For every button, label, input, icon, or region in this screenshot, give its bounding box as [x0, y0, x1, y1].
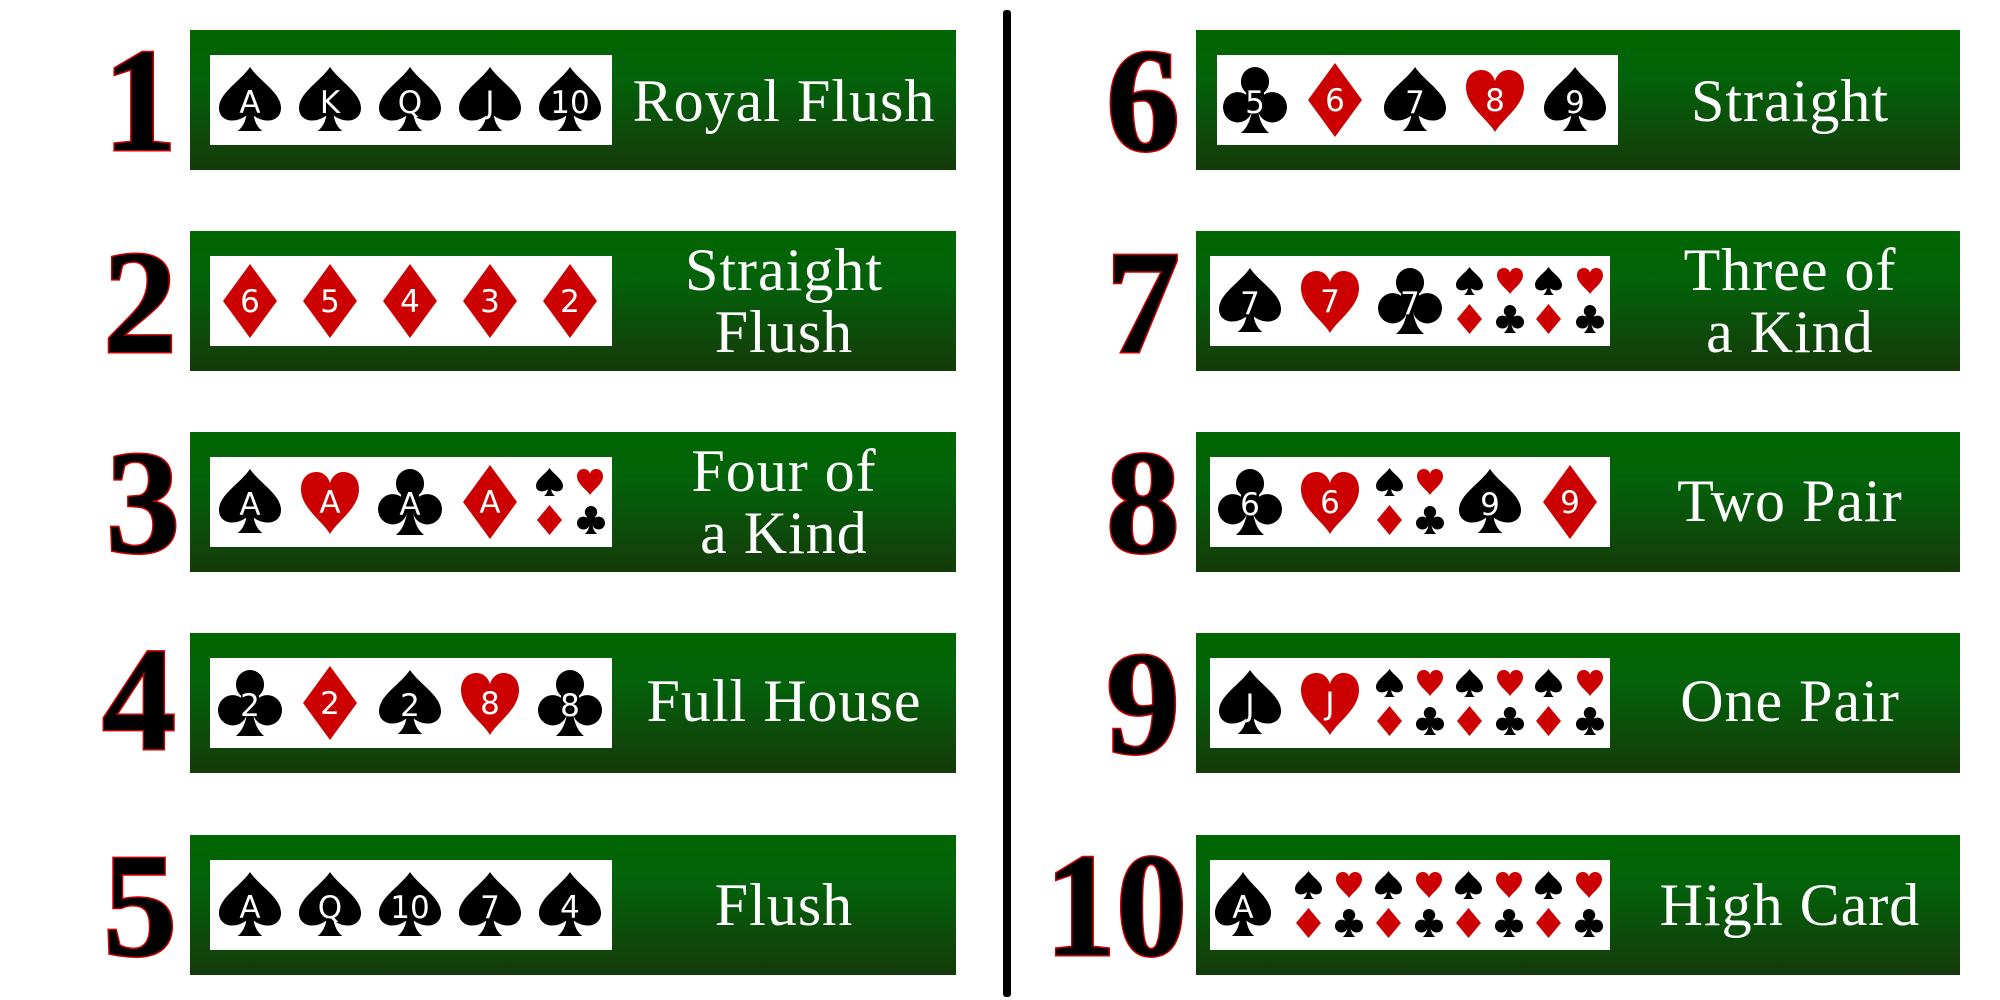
label 8: Two Pair — [1677, 468, 1903, 534]
number 1: 1 — [103, 19, 177, 183]
number 5: 5 — [103, 824, 177, 988]
cards 1: K — [320, 85, 341, 121]
cards 2: 5 — [320, 284, 340, 320]
label 1: Royal Flush — [633, 68, 935, 134]
cards 3: A — [319, 485, 341, 521]
cards 2: 2 — [560, 284, 580, 320]
cards 9 — [1210, 658, 1610, 748]
number 10: 10 — [1045, 824, 1187, 988]
number 7: 7 — [1106, 221, 1180, 385]
cards 8: 9 — [1560, 485, 1580, 521]
cards 10 — [1210, 860, 1610, 950]
cards 6 — [1217, 55, 1618, 145]
cards 3 — [210, 457, 612, 547]
hand 4: Full House — [102, 618, 956, 782]
label 7: Three of — [1684, 237, 1896, 303]
panel 7 — [1196, 231, 1960, 371]
panel 1 — [190, 30, 956, 170]
cards 4: 8 — [560, 688, 580, 724]
cards 6: 5 — [1245, 85, 1265, 121]
cards 1: Q — [398, 85, 422, 121]
number 6: 6 — [1106, 19, 1180, 183]
panel 10 — [1196, 835, 1960, 975]
cards 1: J — [483, 85, 495, 121]
label 3: a Kind — [700, 500, 868, 566]
panel 3 — [190, 432, 956, 572]
hand 2: Straight Flush — [103, 221, 956, 385]
cards 3: A — [239, 487, 261, 523]
panel 9 — [1196, 633, 1960, 773]
hand 9: One Pair — [1106, 622, 1960, 786]
label 9: One Pair — [1680, 668, 1900, 734]
panel 8 — [1196, 432, 1960, 572]
hand 8: Two Pair — [1106, 421, 1960, 585]
cards 7 — [1210, 256, 1610, 346]
label 2: Flush — [715, 299, 853, 365]
label 10: High Card — [1660, 872, 1920, 938]
cards 5 — [210, 860, 612, 950]
cards 6: 8 — [1485, 83, 1505, 119]
cards 7: 7 — [1240, 286, 1260, 322]
cards 6: 9 — [1565, 85, 1585, 121]
cards 4: 8 — [480, 686, 500, 722]
cards 7: 7 — [1400, 286, 1420, 322]
cards 5: 4 — [560, 890, 580, 926]
cards 2 — [210, 256, 612, 346]
label 2: Straight — [685, 237, 883, 303]
label 3: Four of — [691, 438, 877, 504]
cards 5: 10 — [390, 890, 430, 926]
label 5: Flush — [715, 872, 853, 938]
hand 10: High Card — [1045, 824, 1960, 988]
cards 9: J — [1243, 688, 1255, 724]
cards 8: 6 — [1320, 485, 1340, 521]
number 8: 8 — [1106, 421, 1180, 585]
number 2: 2 — [103, 221, 177, 385]
cards 4 — [210, 658, 612, 748]
cards 1 — [210, 55, 612, 145]
cards 4: 2 — [400, 688, 420, 724]
panel 4 — [190, 633, 956, 773]
cards 4: 2 — [320, 686, 340, 722]
cards 10: A — [1232, 890, 1254, 926]
cards 1: 10 — [550, 85, 590, 121]
cards 7: 7 — [1320, 284, 1340, 320]
label 6: Straight — [1691, 68, 1889, 134]
hand 3: Four of a Kind — [106, 421, 956, 585]
number 4: 4 — [102, 618, 176, 782]
panel 6 — [1196, 30, 1960, 170]
cards 8 — [1210, 457, 1610, 547]
cards 8: 9 — [1480, 487, 1500, 523]
cards 8: 6 — [1240, 487, 1260, 523]
number 9: 9 — [1106, 622, 1180, 786]
cards 2: 3 — [480, 284, 500, 320]
cards 5: 7 — [480, 890, 500, 926]
divider — [1003, 10, 1011, 997]
cards 5: A — [239, 890, 261, 926]
label 7: a Kind — [1706, 299, 1874, 365]
cards 9: J — [1323, 686, 1335, 722]
hand 5: Flush — [103, 824, 956, 988]
hand 1: Royal Flush — [103, 19, 956, 183]
number 3: 3 — [106, 421, 180, 585]
label 4: Full House — [646, 668, 922, 734]
cards 6: 6 — [1325, 83, 1345, 119]
cards 5: Q — [318, 890, 342, 926]
cards 2: 4 — [400, 284, 420, 320]
cards 6: 7 — [1405, 85, 1425, 121]
cards 1: A — [239, 85, 261, 121]
cards 4: 2 — [240, 688, 260, 724]
hand 7: Three of a Kind — [1106, 221, 1960, 385]
panel 5 — [190, 835, 956, 975]
cards 3: A — [479, 485, 501, 521]
cards 2: 6 — [240, 284, 260, 320]
hand 6: Straight — [1106, 19, 1960, 183]
cards 3: A — [399, 487, 421, 523]
panel 2 — [190, 231, 956, 371]
